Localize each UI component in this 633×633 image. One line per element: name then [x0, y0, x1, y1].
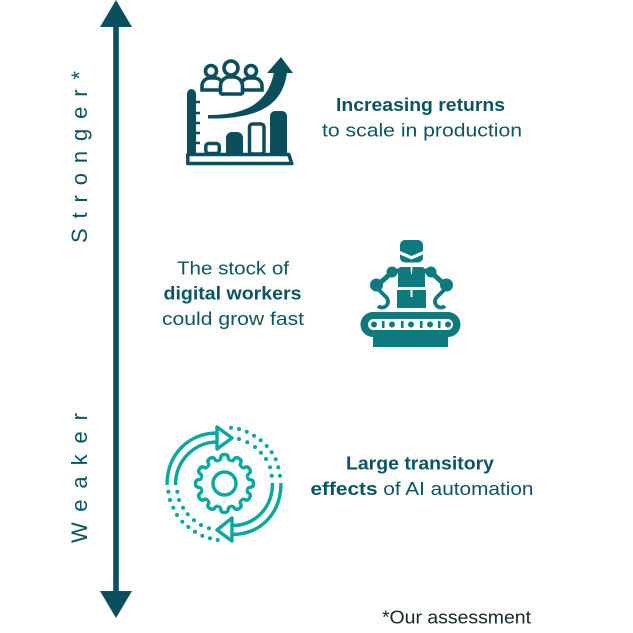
icon: rising chart with people	[187, 57, 293, 164]
growth arrow	[208, 72, 287, 119]
text: increasing returns: Increasing returns	[336, 95, 505, 115]
dotted lower left arc	[166, 490, 220, 542]
dotted upper right arc	[229, 426, 282, 478]
upper left arrow	[167, 433, 217, 485]
robot torso	[398, 267, 425, 287]
conveyor belt	[360, 312, 460, 347]
bars	[206, 144, 219, 154]
icon: gear with cycle arrows	[166, 426, 282, 542]
robot head	[400, 240, 423, 256]
left robot arm	[370, 266, 398, 308]
ruler	[187, 89, 196, 153]
vertical strength axis arrow	[100, 0, 132, 618]
axis label: weaker: Weaker	[67, 413, 92, 543]
text: digital workers: could grow fast	[162, 309, 304, 329]
text: increasing returns: to scale in production	[322, 120, 522, 140]
text: digital workers: digital workers	[164, 284, 302, 304]
text: large transitory effects	[310, 454, 534, 499]
base	[188, 154, 292, 164]
footnote: *Our assessment	[382, 608, 531, 628]
lower right arrow	[232, 483, 281, 534]
box	[397, 290, 426, 308]
text: large transitory effects: effects of AI automation	[310, 479, 534, 499]
text: digital workers	[162, 258, 304, 329]
gear	[196, 454, 254, 512]
text: large transitory effects: Large transitory	[346, 454, 494, 474]
icon: robot on conveyor belt	[360, 240, 460, 347]
axis label: stronger: Stronger*	[67, 71, 92, 243]
right robot arm	[425, 266, 453, 308]
text: digital workers: The stock of	[177, 258, 290, 278]
text: increasing returns	[322, 95, 522, 140]
people group	[202, 61, 262, 94]
